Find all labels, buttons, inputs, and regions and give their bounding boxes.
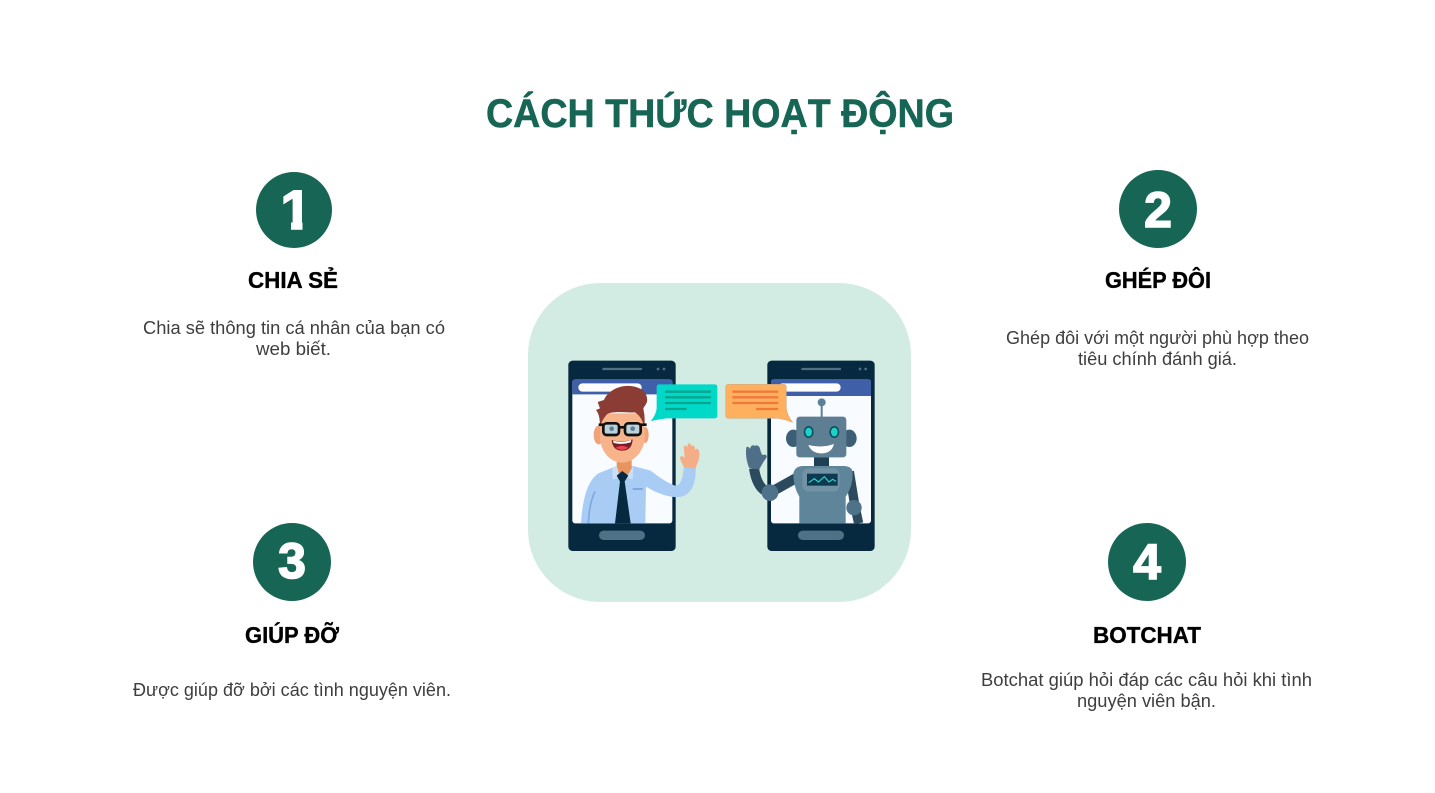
robot ears and head	[786, 430, 801, 447]
ears and face	[594, 426, 604, 444]
central illustration panel	[528, 283, 911, 602]
description: chia se	[143, 318, 445, 359]
description: ghep doi	[1006, 328, 1309, 369]
hair	[596, 386, 647, 427]
heading: ghep doi: GHÉP ĐÔI	[1105, 266, 1211, 293]
speech bubble: orange	[726, 384, 793, 422]
speech bubble: teal	[651, 384, 717, 421]
left arm	[754, 468, 797, 493]
heading: botchat: BOTCHAT	[1093, 622, 1201, 648]
step 4: botchat	[981, 523, 1312, 711]
number badge 3: 3	[278, 533, 306, 589]
description: chia se: Chia sẽ thông tin cá nhân của bạn có	[143, 318, 445, 338]
number badge 2	[1119, 170, 1197, 248]
description: botchat: nguyện viên bận.	[1077, 691, 1216, 711]
description: ghep doi: Ghép đôi với một người phù hợp theo	[1006, 328, 1309, 348]
robot neck	[814, 457, 829, 467]
robot body	[793, 466, 853, 523]
description: botchat: Botchat giúp hỏi đáp các câu hỏi khi tình	[981, 670, 1312, 690]
step 2: match	[1006, 170, 1309, 369]
number badge 1: 1	[280, 178, 312, 241]
tie	[615, 471, 631, 523]
heading: chia se: CHIA SẺ	[248, 265, 338, 293]
neck	[617, 455, 632, 477]
hand	[680, 443, 699, 469]
number badge 2: 2	[1144, 182, 1172, 238]
description: botchat	[981, 670, 1312, 711]
description: chia se: web biết.	[255, 339, 331, 359]
right arm	[849, 472, 859, 523]
shirt and arm	[581, 466, 696, 523]
number badge 4: 4	[1133, 534, 1161, 590]
number badge 3	[253, 523, 331, 601]
number badge 4	[1108, 523, 1186, 601]
robot hand	[746, 445, 767, 469]
description: ghep doi: tiêu chính đánh giá.	[1078, 349, 1237, 369]
glasses	[599, 423, 647, 435]
illustration: person on phone	[568, 361, 717, 551]
antenna	[819, 403, 825, 418]
step 1: share	[143, 172, 445, 359]
step 3: help	[133, 523, 451, 700]
title: CÁCH THỨC HOẠT ĐỘNG	[486, 90, 954, 136]
illustration: robot on phone	[726, 361, 875, 551]
description: giup do: Được giúp đỡ bởi các tình nguyện viên.	[133, 680, 451, 700]
number badge 1	[256, 172, 332, 248]
heading: giup do: GIÚP ĐỠ	[245, 621, 339, 648]
mouth	[612, 439, 633, 451]
